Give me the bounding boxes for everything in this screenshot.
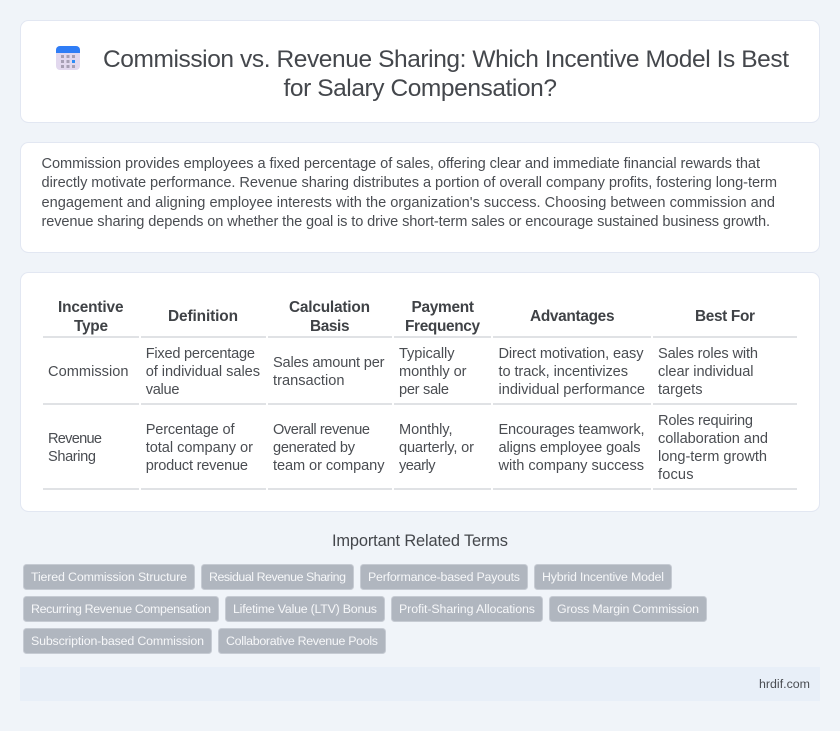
tag list: related terms: Recurring Revenue Compensation [31,602,211,616]
footer source text: hrdif.com [759,677,810,691]
table header row: Type [74,318,108,335]
table row: commission: of individual sales [146,364,260,380]
table row: revenue sharing [48,413,768,483]
table row: commission: individual performance [498,382,645,398]
table rules [43,336,797,490]
table row: revenue sharing: product revenue [146,458,248,474]
table row: revenue sharing: Roles requiring [658,413,753,429]
table row: revenue sharing: Revenue [48,431,102,447]
table row: revenue sharing: generated by [273,440,356,456]
table header row: Advantages [530,308,614,325]
table row: revenue sharing: Overall revenue [273,422,370,438]
table row: commission: value [146,382,180,398]
tag list: related terms: Lifetime Value (LTV) Bonus [233,602,377,616]
tag list: related terms: Tiered Commission Structure [31,570,187,584]
table row: commission: Sales amount per [273,355,385,371]
title [103,46,789,102]
text block: introduction paragraph: revenue sharing depends on whether the goal is to drive short-term sales or encourage sustained business growth. [42,214,770,230]
table row: commission [48,346,758,398]
table row: commission: Fixed percentage [146,346,255,362]
table row: commission: targets [658,382,702,398]
table row: revenue sharing: with company success [498,458,644,474]
title: for Salary Compensation? [284,75,557,102]
table row: revenue sharing: Percentage of [146,422,235,438]
table header row: Basis [310,318,350,335]
table header row: Payment [412,299,474,316]
table row: revenue sharing: long-term growth [658,449,767,465]
panel: title header [20,20,820,122]
tag list: related terms: Residual Revenue Sharing [209,570,346,584]
tag list: related terms: Gross Margin Commission [557,602,699,616]
table row: revenue sharing: team or company [273,458,385,474]
footer [20,667,820,701]
table row: revenue sharing: Encourages teamwork, [498,422,644,438]
icon: calendar [56,46,80,70]
table row: revenue sharing: focus [658,467,694,483]
text block: introduction paragraph: directly motivate performance. Revenue sharing distributes a portion of overall company profits, fostering long-term [42,175,777,191]
table row: commission: to track, incentivizes [498,364,628,380]
table row: revenue sharing: total company or [146,440,253,456]
table row: revenue sharing: yearly [399,458,436,474]
table header row: Best For [695,308,755,325]
table header row: Calculation [289,299,370,316]
table row: commission: clear individual [658,364,754,380]
table header row: Incentive [58,299,124,316]
tag list: related terms: Performance-based Payouts [368,570,520,584]
table row: commission: Typically [399,346,455,362]
title: Commission vs. Revenue Sharing: Which Incentive Model Is Best [103,46,789,73]
text block: introduction paragraph [42,156,777,230]
tag list: related terms: Collaborative Revenue Pools [226,634,378,648]
text block: introduction paragraph: Commission provides employees a fixed percentage of sales, offering clear and immediate financial rewards that [42,156,760,172]
table row: revenue sharing: quarterly, or [399,440,474,456]
heading: important related terms: Important Related Terms [332,532,508,550]
panel: comparison table [20,272,820,512]
text block: introduction paragraph: engagement and aligning employee interests with the organization's success. Choosing between commission and [42,195,775,211]
table header row: Definition [168,308,238,325]
table header row [58,299,755,335]
table row: commission: per sale [399,382,449,398]
table row: commission: Sales roles with [658,346,758,362]
table row: commission: Direct motivation, easy [498,346,644,362]
table row: revenue sharing: collaboration and [658,431,768,447]
tag list: related terms: Subscription-based Commission [31,634,204,648]
tag list: related terms: Hybrid Incentive Model [542,570,664,584]
table row: commission: Commission [48,364,128,380]
table row: commission: monthly or [399,364,467,380]
table row: revenue sharing: aligns employee goals [498,440,640,456]
table header row: Frequency [405,318,480,335]
table row: commission: transaction [273,373,344,389]
table row: revenue sharing: Monthly, [399,422,452,438]
table row: revenue sharing: Sharing [48,449,96,465]
tag list: related terms: Profit-Sharing Allocations [399,602,535,616]
panel: introduction [20,142,820,252]
tag list: related terms [24,564,706,654]
